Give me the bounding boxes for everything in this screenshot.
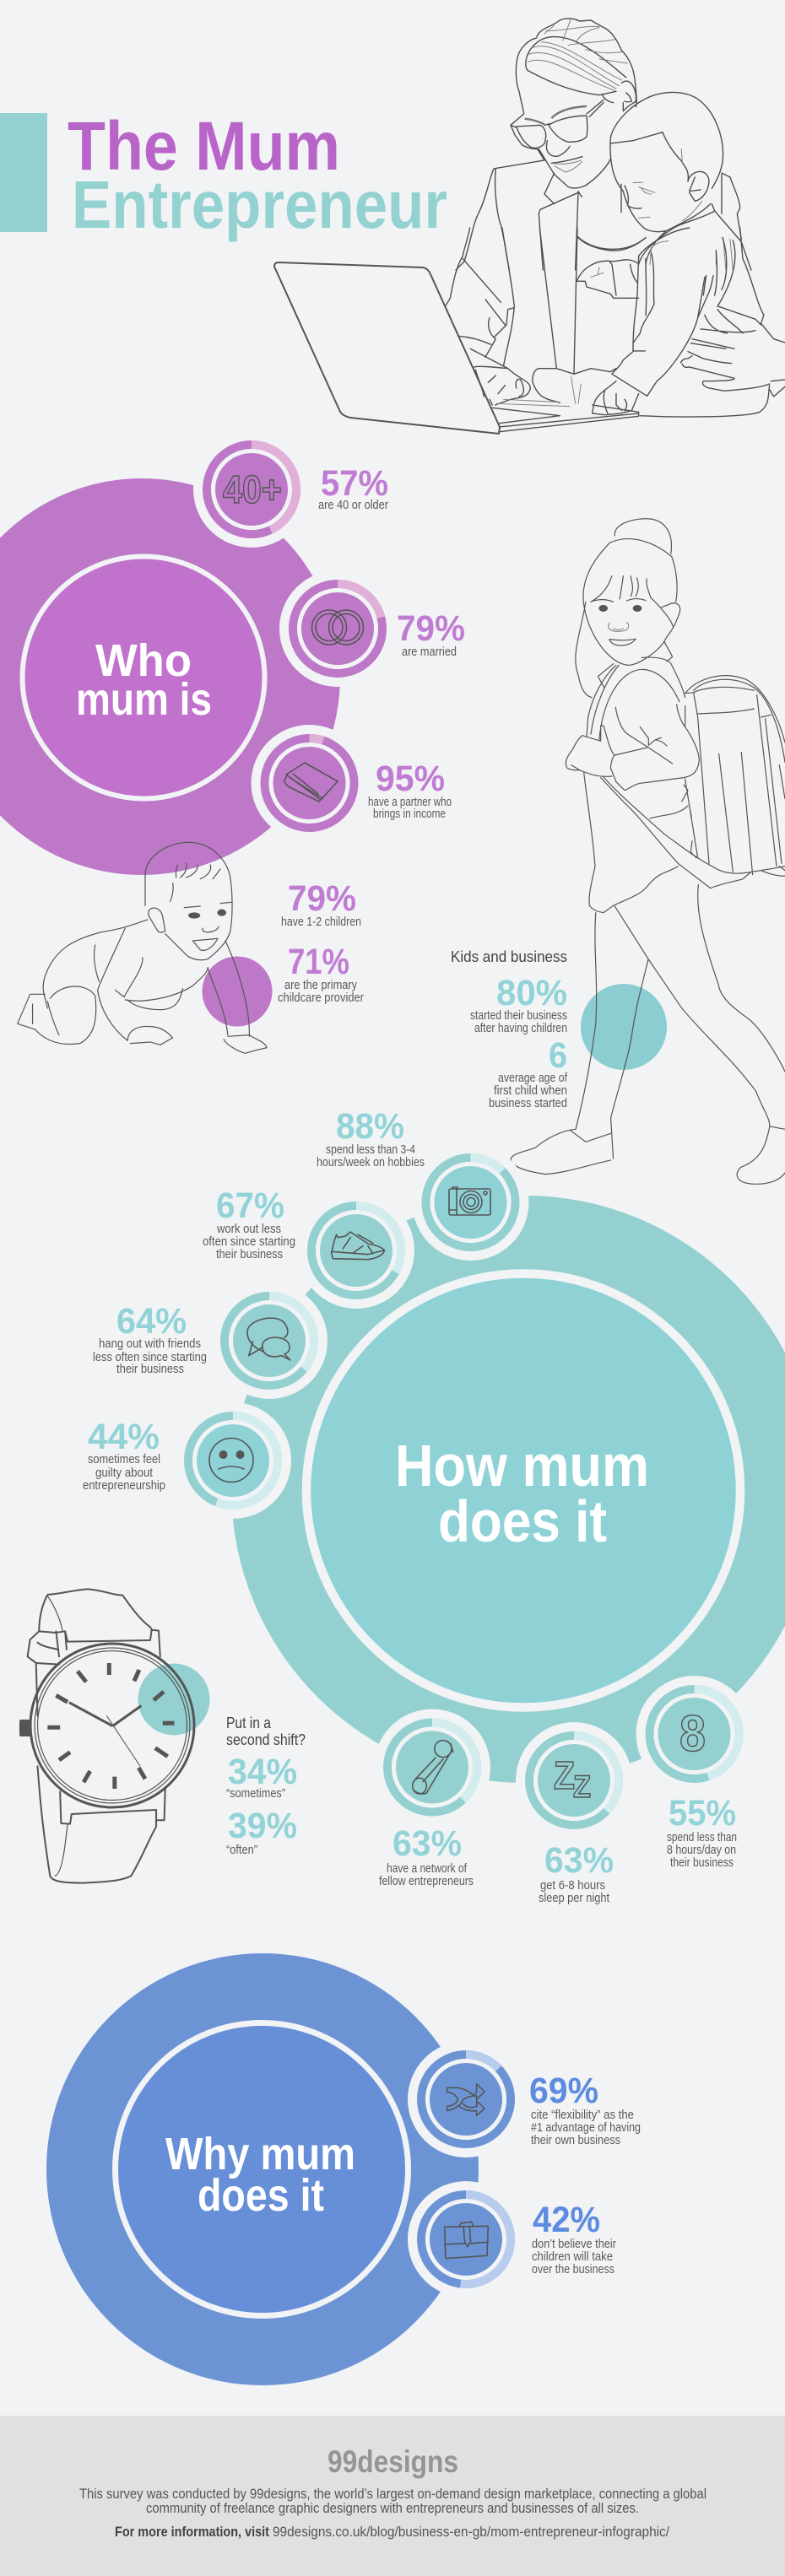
stat block: kids and business: average age of — [498, 1072, 568, 1085]
stat text: 88%: 88% — [336, 1106, 404, 1147]
stat block: kids and business: after having children — [474, 1022, 567, 1035]
stat text: 69%: their own business — [531, 2134, 620, 2147]
stat text: 67%: their business — [216, 1248, 283, 1261]
stat text: 63% sleep: get 6-8 hours — [540, 1879, 605, 1893]
stat text: 64%: hang out with friends — [99, 1337, 201, 1351]
heading: Why mum does it: Why mum — [165, 2129, 355, 2179]
stat text: 69%: cite “flexibility” as the — [531, 2109, 634, 2122]
stat text: 79% married: 79% — [397, 608, 465, 649]
logo: 99designs: 99designs — [328, 2444, 458, 2479]
inner purple circle with ring — [22, 557, 265, 798]
stat text: 95%: have a partner who — [368, 796, 452, 809]
stat text: children: 71% — [288, 942, 349, 982]
stat text: children: are the primary — [284, 979, 358, 992]
stat text: 95% — [368, 759, 452, 821]
stat text: 88% — [317, 1106, 425, 1169]
heading: Why mum does it — [165, 2129, 355, 2221]
stat ring: chat 64% — [211, 1283, 328, 1399]
stat ring: shoe 67% — [298, 1192, 414, 1309]
large teal circle — [231, 1196, 785, 1783]
stat text: 79% married: are married — [402, 645, 457, 659]
stat text: 63% network: 63% — [392, 1823, 462, 1864]
stat text: 64%: their business — [116, 1363, 184, 1376]
stat ring: briefcase 42% — [408, 2181, 524, 2298]
stat text: 67%: often since starting — [203, 1235, 295, 1249]
stat text: second shift — [226, 1714, 306, 1857]
stat text: 44%: sometimes feel — [88, 1453, 160, 1466]
stat ring: 79% are married — [279, 570, 396, 687]
title line: Entrepreneur: Entrepreneur — [72, 167, 447, 242]
heading: How mum does it: How mum — [395, 1433, 649, 1499]
stat text: 64%: 64% — [116, 1301, 187, 1342]
stat ring: phone 63% — [374, 1709, 490, 1826]
stat text: 63% sleep: 63% — [544, 1840, 614, 1881]
stat ring: eight hours 55% — [636, 1676, 753, 1792]
title accent bar — [0, 113, 47, 232]
stat text: 69%: 69% — [529, 2071, 598, 2111]
stat text: 42%: 42% — [533, 2200, 600, 2240]
stat ring: sleep 63%: Z — [554, 1753, 575, 1797]
stat ring: camera 88% — [412, 1144, 528, 1261]
stat text: children: have 1-2 children — [281, 915, 361, 929]
heading: Why mum does it: does it — [198, 2170, 324, 2221]
stat block: kids and business: Kids and business — [451, 948, 567, 965]
stat text: 88%: spend less than 3-4 — [326, 1143, 415, 1157]
stat text: 63% sleep — [539, 1840, 614, 1905]
footer source link — [115, 2525, 669, 2540]
footer source link: 99designs.co.uk/blog/business-en-gb/mom-entrepreneur-infographic/ — [273, 2525, 669, 2540]
inner teal circle with ring — [306, 1274, 740, 1708]
title block — [0, 108, 447, 242]
stat text: 63% sleep: sleep per night — [539, 1892, 609, 1905]
stat text: second shift: “sometimes” — [226, 1787, 285, 1801]
stat block: kids and business: first child when — [494, 1084, 567, 1098]
stat text: 42%: children will take — [532, 2250, 613, 2264]
heading: Who mum is: mum is — [76, 674, 212, 725]
stat text: 55%: 55% — [669, 1793, 736, 1833]
stat ring: sleep 63% — [516, 1722, 632, 1839]
stat text: second shift: “often” — [226, 1844, 257, 1857]
illustration: crawling baby — [18, 842, 267, 1053]
stat text: 42%: don’t believe their — [532, 2238, 616, 2251]
stat text: 95%: 95% — [376, 759, 445, 799]
illustration: mother and child at laptop — [274, 19, 785, 434]
inner blue circle with ring — [115, 2023, 409, 2315]
stat text: second shift: 39% — [228, 1806, 297, 1846]
stat ring: flexibility 69% — [408, 2041, 524, 2157]
stat text: 44% — [83, 1417, 165, 1493]
large purple circle — [0, 478, 340, 875]
stat text: 95%: brings in income — [373, 807, 446, 821]
stat text: 63% network: fellow entrepreneurs — [379, 1875, 474, 1888]
stat text: 55% — [667, 1793, 737, 1870]
stat text: 55%: their business — [670, 1856, 734, 1870]
panel: how mum does it — [83, 1106, 785, 1905]
stat ring: sad face 44% — [175, 1402, 291, 1519]
heading: How mum does it: does it — [438, 1488, 607, 1554]
stat text: 42%: over the business — [532, 2263, 614, 2276]
stat block: kids and business — [451, 948, 568, 1110]
stat text: 44%: entrepreneurship — [83, 1479, 165, 1493]
illustration: wristwatch — [19, 1589, 194, 1883]
stat text: 44%: 44% — [88, 1417, 160, 1457]
large blue circle — [46, 1953, 479, 2385]
footer source link: For more information, visit — [115, 2525, 269, 2540]
footer description: This survey was conducted by 99designs, the world’s largest on-demand design marketplace, connecting a global — [79, 2487, 706, 2502]
stat text: 69% — [529, 2071, 641, 2147]
stat ring: 95% partner income — [252, 725, 368, 841]
footer description: community of freelance graphic designers with entrepreneurs and businesses of all sizes. — [146, 2501, 639, 2516]
stat text: 67% — [203, 1185, 295, 1261]
stat text: 57%: are 40 or older — [318, 499, 388, 512]
stat ring: 57% are 40 or older — [193, 431, 310, 548]
illustration: girl with backpack — [511, 519, 785, 1184]
stat text: 63% network — [379, 1823, 474, 1888]
stat text: children — [278, 878, 364, 1005]
stat text: 67%: 67% — [216, 1185, 284, 1226]
circle accent: teal behind girl's leg — [581, 984, 667, 1070]
stat text: 55%: spend less than — [667, 1831, 737, 1844]
stat block: kids and business: started their business — [470, 1009, 567, 1023]
heading: How mum does it — [395, 1433, 649, 1554]
stat ring: 57% are 40 or older: 40+ — [223, 467, 282, 511]
stat text: second shift: Put in a — [226, 1714, 272, 1731]
title line: The Mum: The Mum — [68, 108, 340, 185]
stat text: children: 79% — [288, 878, 356, 919]
stat text: 42% — [532, 2200, 616, 2276]
stat ring: eight hours 55%: 8 — [679, 1705, 706, 1762]
heading: Who mum is — [76, 635, 212, 725]
stat block: kids and business: business started — [489, 1097, 567, 1110]
heading: Who mum is: Who — [95, 635, 192, 686]
footer panel — [0, 2416, 785, 2576]
stat text: 88%: hours/week on hobbies — [317, 1156, 425, 1169]
stat text: 44%: guilty about — [95, 1466, 153, 1480]
stat text: 69%: #1 advantage of having — [531, 2121, 641, 2135]
footer description — [79, 2487, 706, 2516]
stat text: 57%: 57% — [321, 463, 388, 504]
panel: why mum does it — [46, 1953, 641, 2385]
circle accent: teal behind watch — [138, 1664, 209, 1735]
stat block: kids and business: 6 — [549, 1035, 567, 1076]
stat text: 64% — [93, 1301, 207, 1376]
stat text: 64%: less often since starting — [93, 1351, 207, 1364]
stat block: kids and business: 80% — [496, 973, 567, 1013]
stat text: second shift: second shift? — [226, 1731, 306, 1748]
stat text: 67%: work out less — [216, 1223, 281, 1236]
stat ring: sleep 63%: Z — [573, 1769, 591, 1804]
stat text: children: childcare provider — [278, 991, 364, 1005]
stat text: 63% network: have a network of — [387, 1862, 468, 1876]
stat text: 55%: 8 hours/day on — [667, 1844, 736, 1857]
panel: who mum is — [0, 431, 465, 875]
stat text: second shift: 34% — [228, 1752, 297, 1792]
circle accent: purple behind baby — [203, 957, 272, 1026]
